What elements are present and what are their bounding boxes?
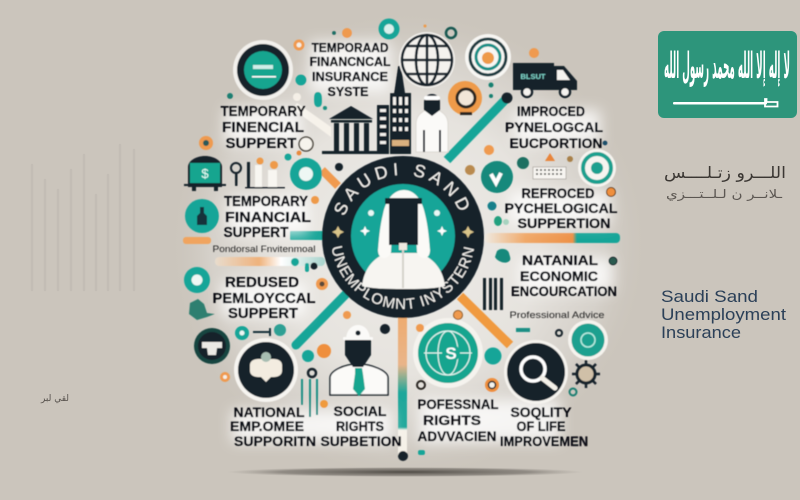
heading: improved psychological education: PYNELOGCAL: [505, 119, 603, 135]
heading: redused employment support: PEMLOYCCAL: [212, 291, 316, 307]
heading: improved psychological education: EUCPORTION: [510, 135, 602, 151]
heading: national economic encouragement: NATANIAL: [522, 253, 598, 268]
icon: city tower: [377, 66, 411, 154]
heading: temporary financial support top: SUPPERT: [226, 136, 297, 152]
figure: [362, 253, 445, 289]
arabic caption right: [664, 163, 786, 202]
heading: social rights: [320, 404, 402, 449]
icon: teal ring badge: [184, 267, 328, 320]
icon: teal globe: [568, 320, 608, 360]
heading: temporary financial support middle: FINANCIAL: [225, 210, 311, 226]
icon: delivery truck: BLSUT: [520, 72, 546, 81]
arabic caption left: لقي لبر: [40, 394, 69, 404]
icon: orange badge: [448, 81, 494, 115]
side title: [661, 288, 786, 342]
heading: national employment support: NATIONAL: [234, 405, 304, 420]
heading: temporary financial support top: TEMPORARY: [220, 104, 306, 120]
heading: temporary financial insurance system: TEMPORAAD: [312, 41, 388, 55]
icon: globe: [399, 32, 455, 88]
heading: social rights: SOCIAL: [334, 404, 386, 419]
icon: dollar globe: [413, 318, 483, 388]
heading: quality of life improvement: OF LIFE: [516, 419, 566, 434]
small caption: professional advice: Professional Advice: [510, 310, 604, 321]
icon: teal diamond badge: [199, 136, 343, 204]
heading: improved psychological education: [505, 103, 603, 151]
icon: small accents lower right: [416, 310, 576, 455]
heading: reduced psychological support: REFROCED: [522, 185, 594, 201]
side title: Insurance: [661, 324, 741, 342]
heading: reduced psychological support: [504, 185, 618, 231]
icon: teal ring top: [294, 18, 539, 110]
heading: reduced psychological support: SUPPERTION: [518, 215, 610, 231]
icon: laptop money: [184, 156, 226, 191]
heading: quality of life improvement: SOQLITY: [510, 405, 572, 420]
heading: professional rights advancement: RIGHTS: [423, 413, 481, 428]
icon: tool group: [231, 158, 285, 188]
heading: redused employment support: REDUSED: [225, 275, 299, 291]
connector bars: [215, 92, 620, 461]
central emblem: [321, 155, 485, 319]
heading: temporary financial insurance system: FINANCNCAL: [310, 55, 391, 69]
heading: social rights: SUPBETION: [320, 434, 402, 449]
icon: dark green badge: [194, 324, 286, 364]
heading: quality of life improvement: IMPROVEMEN: [500, 434, 588, 449]
central light glow: [168, 10, 648, 480]
icon: radar badge: [578, 149, 616, 187]
heading: redused employment support: [212, 275, 316, 322]
heading: temporary financial support middle: SUPPERT: [224, 225, 289, 241]
icon: laptop money: $: [201, 166, 209, 181]
icon: flag badge: [233, 40, 293, 100]
heading: national employment support: EMP.OMEE: [230, 419, 304, 434]
ground shadow: [227, 467, 583, 477]
text halos: [222, 42, 612, 442]
icon: teal circle with bottle: [183, 199, 219, 244]
heading: professional rights advancement: ADVVACIEN: [418, 429, 496, 444]
icon: barcode bars: [483, 278, 503, 310]
icon: right side accents: [488, 140, 617, 265]
faint background bar lines: [32, 145, 134, 290]
heading: temporary financial support middle: TEMPORARY: [224, 194, 308, 210]
heading: professional rights advancement: [418, 397, 498, 444]
heading: temporary financial support top: FINENCIAL: [222, 120, 304, 136]
central emblem: UNEMPLOMNT INYSTERN: [332, 245, 475, 310]
heading: national economic encouragement: ECONOMIC: [520, 269, 598, 284]
heading: social rights: RIGHTS: [336, 419, 384, 434]
icon: side dots left: [227, 93, 318, 272]
side title: Unemployment: [661, 306, 786, 324]
heading: national economic encouragement: ENCOURCATION: [511, 284, 617, 299]
heading: national employment support: [230, 405, 316, 449]
flag of Saudi Arabia: [658, 31, 797, 118]
heading: national economic encouragement: [511, 253, 617, 299]
icon: man in thobe: [416, 94, 448, 152]
icon: magnifier: [504, 340, 568, 404]
icon: dollar globe: S: [445, 344, 457, 363]
heading: quality of life improvement: [500, 405, 588, 449]
arabic caption right: اللـــرو زتـلــــس: [664, 163, 786, 183]
heading: redused employment support: SUPPERT: [228, 306, 298, 322]
heading: temporary financial support middle: [224, 194, 311, 241]
heading: improved psychological education: IMPROCED: [517, 103, 585, 119]
heading: temporary financial insurance system: INSURANCE: [312, 70, 388, 84]
arabic caption right: ـلانــر ن لـلــتـــزي: [666, 187, 783, 202]
icon: bank: [322, 106, 377, 154]
icon: small accents lower left: [220, 311, 390, 417]
icon: gear: [572, 360, 600, 388]
icon: small building with triangle: [533, 153, 573, 179]
heading: national employment support: SUPPORITN: [234, 434, 316, 449]
heading: temporary financial insurance system: [310, 41, 391, 99]
side title: Saudi Sand: [661, 288, 758, 306]
icon: check badge: [465, 145, 529, 193]
icon: target: [465, 34, 511, 80]
heading: temporary financial support top: [220, 104, 306, 152]
icon: delivery truck: [513, 63, 577, 97]
icon: speech pill badge: [234, 338, 298, 402]
heading: professional rights advancement: POFESSNAL: [418, 397, 498, 412]
icon: worker with tie: [330, 325, 388, 396]
emblem title: SAUDI SAND: [334, 162, 470, 216]
small caption: pondorsal: Pondorsal Fnvitenmoal: [212, 244, 316, 254]
heading: temporary financial insurance system: SYSTE: [328, 85, 368, 99]
heading: reduced psychological support: PYCHELOGICAL: [504, 200, 618, 216]
